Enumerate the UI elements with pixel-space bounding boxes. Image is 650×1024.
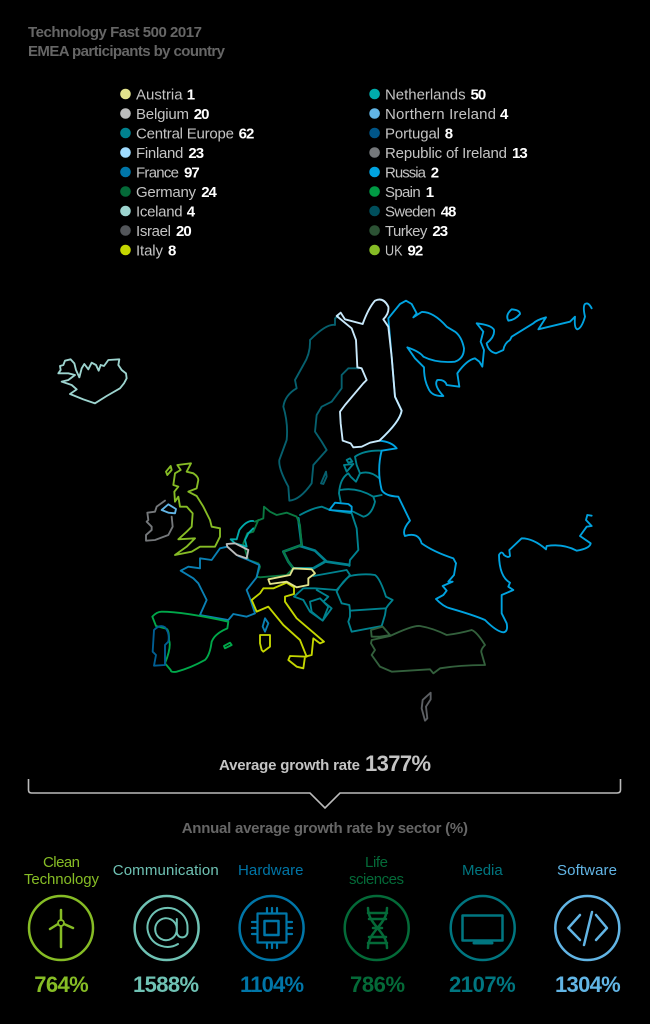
icon: chip [240,896,304,960]
sector: Clean Technology: Clean [43,854,80,871]
legend: Spain: 1 [426,184,434,201]
legend: Portugal [369,126,453,142]
legend: Northern Ireland: Northern Ireland [385,106,496,123]
legend: Italy: Italy [136,242,164,260]
sector: Life sciences: 786% [350,972,405,997]
map: Spain [152,612,232,672]
legend: Belgium: 20 [194,106,210,123]
map: Netherlands [231,521,253,547]
legend: Portugal: Portugal [385,126,440,142]
legend: UK: UK [385,242,402,260]
legend: Turkey: Turkey [385,223,428,240]
title: EMEA participants by country [28,43,226,60]
map: France [181,547,268,632]
sector: Life sciences [345,854,409,997]
legend: France [120,164,200,182]
legend: Germany: Germany [136,184,196,201]
legend: Sweden: Sweden [385,204,436,220]
icon: code brackets [555,896,619,960]
map: UK [166,463,220,555]
legend: Germany [120,184,218,201]
sector: Software [555,862,621,997]
legend: Portugal: 8 [445,126,453,142]
legend: Turkey: 23 [432,223,448,240]
map of Europe [58,300,592,721]
legend: Belgium [120,106,210,123]
sector: Communication: 1588% [133,972,199,997]
legend: Sweden [369,204,456,220]
average growth rate [219,751,431,776]
legend: Spain: Spain [385,184,421,201]
map: Germany [243,507,302,577]
map: Italy [252,583,324,668]
legend: Austria [120,86,195,104]
legend: Republic of Ireland: 13 [512,145,528,162]
legend: UK: 92 [408,242,423,260]
legend: Northern Ireland: 4 [500,106,509,123]
bracket [28,779,620,808]
legend: UK [369,242,423,260]
legend: Russia: 2 [431,164,439,182]
title: Technology Fast 500 2017 [28,24,202,41]
average growth rate: Average growth rate [219,757,360,774]
legend: Iceland: 4 [187,204,196,220]
legend: Republic of Ireland: Republic of Ireland [385,145,507,162]
sector: Software: 1304% [555,972,621,997]
sector: Communication: Communication [113,862,219,879]
legend: Finland: 23 [188,145,204,162]
map: Central Europe [283,451,393,632]
legend: Belgium: Belgium [136,106,189,123]
legend: Iceland [120,204,196,220]
legend: Finland [120,145,204,162]
map: Turkey [371,626,485,673]
legend: Finland: Finland [136,145,183,162]
map: Northern Ireland [162,504,176,513]
legend: Iceland: Iceland [136,204,183,220]
sector: Hardware: Hardware [238,862,304,879]
legend: Turkey [369,223,448,240]
legend: Central Europe: 62 [239,126,254,142]
map: Sweden [279,316,358,501]
sector: Hardware [238,862,304,997]
icon: monitor [451,896,515,960]
legend: Italy [120,242,176,260]
icon: DNA helix [345,896,409,960]
legend: Spain [369,184,434,201]
legend: Netherlands [369,86,486,104]
map: Portugal [153,626,169,666]
legend: countries [120,86,528,260]
map: Belgium [227,543,248,558]
icon: wind turbine [29,896,93,960]
average growth rate: 1377% [365,751,431,776]
legend: France: 97 [184,164,200,182]
map: Israel [422,693,431,721]
legend: Russia: Russia [385,164,427,182]
legend: Russia [369,164,439,182]
sector: Hardware: 1104% [240,972,304,997]
map: Russia [329,301,592,632]
sector: Clean Technology: 764% [34,972,89,997]
sector: Life sciences: sciences [349,871,404,888]
sector: Clean Technology: Technology [24,871,100,888]
sector: Media: 2107% [449,972,516,997]
sector: Life sciences: Life [365,854,388,871]
legend: Austria: Austria [136,86,183,104]
sector: Clean Technology [24,854,100,997]
legend: France: France [136,164,179,182]
legend: Netherlands: 50 [470,86,486,104]
map: Finland [337,300,402,447]
subtitle: Annual average growth rate by sector (%) [182,820,468,837]
legend: Italy: 8 [168,242,176,260]
sector: Media [449,862,516,997]
icon: at sign [135,896,199,960]
map: Austria [268,568,315,587]
legend: Sweden: 48 [441,204,456,220]
sector: Software: Software [557,862,617,879]
sector: Communication [113,862,219,997]
map: Republic of Ireland [146,501,173,541]
title [28,24,226,60]
sector: Media: Media [462,862,503,879]
legend: Netherlands: Netherlands [385,86,466,104]
legend: Austria: 1 [187,86,195,104]
legend: Central Europe: Central Europe [136,126,234,142]
legend: Israel: 20 [176,223,192,240]
map: Iceland [58,359,127,403]
legend: Germany: 24 [201,184,218,201]
legend: Israel [120,223,192,240]
legend: Israel: Israel [136,223,171,240]
